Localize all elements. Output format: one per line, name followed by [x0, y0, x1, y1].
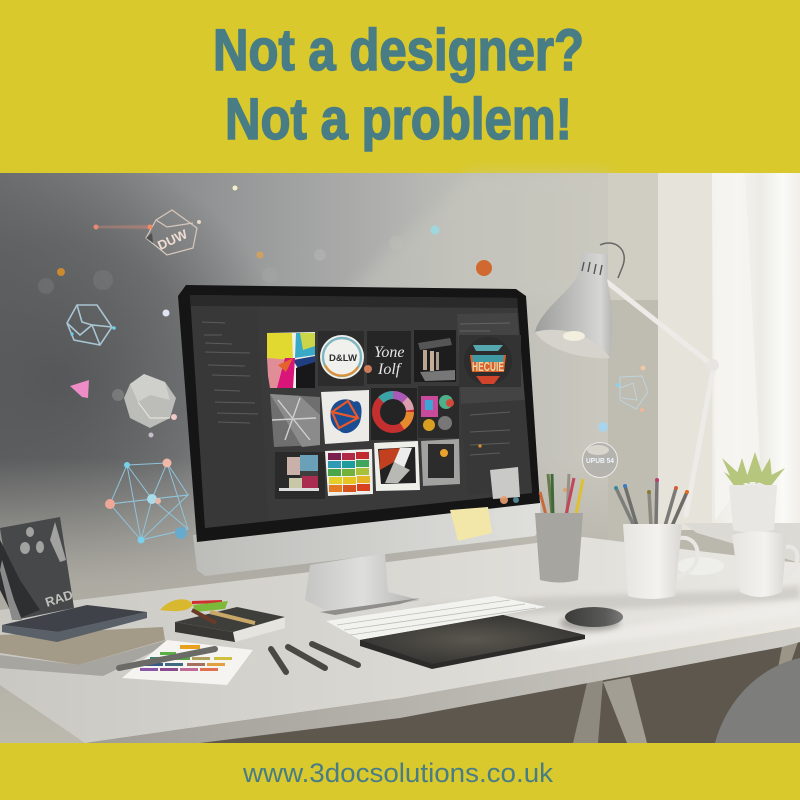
lamp cable: [600, 243, 624, 278]
trestle legs: [573, 680, 603, 743]
thumbnail: D&LW badge: [318, 331, 364, 386]
under-desk shadow area: [0, 630, 800, 743]
thumbnail: script lettering: Iolf: [377, 361, 403, 378]
photo scene: designer desk: [0, 173, 800, 743]
website url: www.3docsolutions.co.uk: [242, 758, 554, 788]
coffee mug: [732, 532, 797, 597]
desk front face: [85, 627, 800, 743]
thumbnail: mini photos: [275, 452, 325, 499]
icon: DUW gem: DUW: [155, 226, 190, 253]
wall: [0, 173, 658, 743]
title: [213, 18, 584, 152]
dark poster leaning on wall: RAD: [43, 587, 75, 610]
left layers panel: [191, 306, 268, 528]
thumbnail: swatch grid: [325, 449, 373, 496]
lamp shade: [535, 252, 612, 358]
title: Not a designer?: [213, 18, 584, 83]
icon: wireframe cube: [67, 305, 116, 345]
right properties panel: [457, 313, 532, 495]
desk top: [0, 537, 800, 743]
marker on swatch: [119, 649, 215, 668]
window sill: [683, 523, 800, 563]
mouse: [560, 607, 623, 631]
monitor chin: [193, 498, 541, 576]
thumbnail: script lettering: Yone: [374, 344, 405, 361]
dark poster leaning on wall: [0, 517, 75, 620]
floating shapes: [38, 186, 648, 544]
window and curtain: [658, 173, 800, 613]
lamp: [535, 243, 724, 575]
stylus pens on desk: [271, 644, 358, 672]
thumbnail: heart blob: [321, 390, 369, 444]
icon: pink arrow: [70, 380, 89, 398]
icon: small network sphere: [616, 366, 648, 412]
thumbnail: HECUBE badge: HECUIE: [472, 359, 504, 374]
monitor stand: [305, 553, 420, 615]
icon: frosted polyhedron: [124, 374, 176, 428]
thumbnail: mixed collage: [418, 386, 459, 438]
drawing tablet: [360, 615, 585, 669]
note card on screen: [490, 467, 520, 499]
icon: glass bubble: UPUB 54: [586, 458, 614, 465]
footer band: [0, 743, 800, 800]
keyboard: [326, 596, 546, 640]
thumbnail: red abstract: [374, 441, 420, 491]
sticky note: [450, 507, 492, 541]
lamp base: [676, 557, 724, 575]
mug with markers: [614, 478, 698, 599]
thumbnail: colour petals: [267, 332, 315, 388]
icon: network molecule: [105, 458, 188, 544]
desk: [0, 537, 800, 743]
tan book: [0, 627, 165, 665]
lamp rim: [535, 330, 610, 358]
thumbnail: HECUBE badge: [459, 335, 521, 387]
lamp arm: [607, 282, 713, 515]
icon: glass bubble: [582, 442, 618, 478]
icon: DUW gem: [146, 210, 197, 255]
header band: [0, 0, 800, 173]
thumbnail: orange dot poster: [421, 439, 460, 486]
thumbnail: colour donut: [371, 388, 417, 440]
glowing particles: [38, 186, 608, 492]
eraser and pencils: [160, 599, 193, 611]
far leg: [778, 642, 798, 668]
stacked books: [0, 605, 167, 676]
thumbnail: grey architecture: [270, 394, 320, 447]
pencil cup: [535, 474, 583, 582]
chair: [715, 658, 800, 743]
title: Not a problem!: [225, 87, 572, 152]
desk shadow bands: [420, 585, 800, 620]
screen: [190, 295, 532, 528]
thumbnail: script lettering: [367, 331, 411, 384]
monitor: [178, 285, 541, 615]
glow: [364, 365, 372, 373]
thumbnail: dark photo: [414, 330, 456, 382]
dark top book: [2, 612, 147, 642]
monitor bezel: [178, 285, 540, 542]
thumbnail: D&LW badge: D&LW: [329, 353, 357, 364]
colour swatch sheet: [119, 640, 253, 685]
small notebook with pencils: [160, 599, 285, 642]
grey book: [0, 640, 167, 676]
plant pot: [722, 452, 785, 532]
